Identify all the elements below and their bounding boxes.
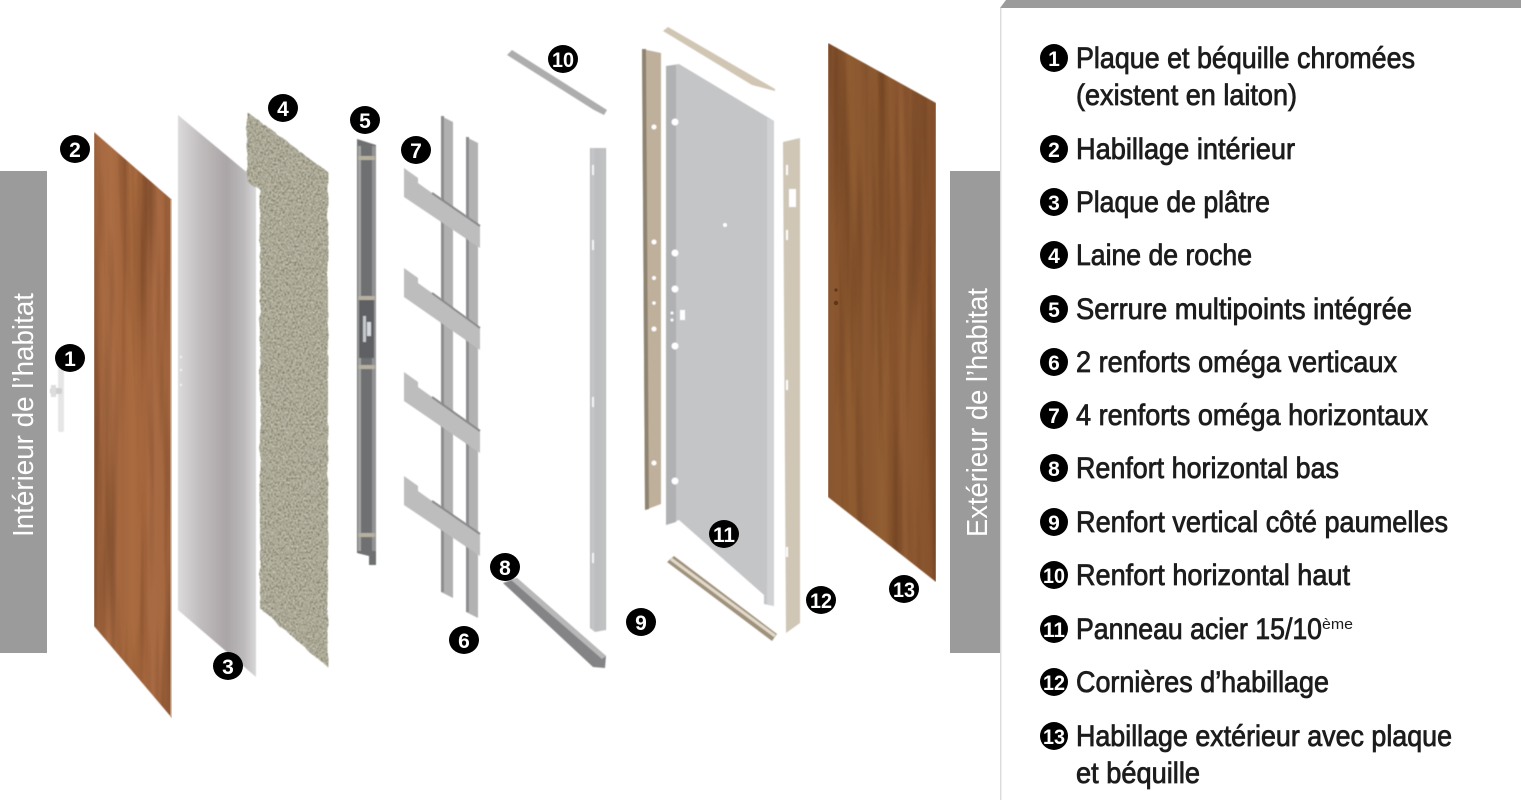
legend item 13: 13 [1043,726,1065,749]
side label: exterior [950,171,1000,653]
number badges on the drawing: 12 [810,590,832,613]
legend item 6: 6 [1048,352,1060,375]
part 11: steel panel [666,64,774,606]
part 1: chrome handle [50,365,64,432]
legend item 7: 7 [1048,405,1060,428]
legend item 10: 10 [1043,565,1065,588]
legend item 9: 9 [1048,512,1060,535]
legend item 8: 8 [1048,458,1060,481]
legend item 1: 1 [1048,48,1060,71]
side label: exterior: Extérieur de l’habitat [962,288,994,537]
number badges on the drawing: 2 [69,139,81,162]
number badges on the drawing: 1 [64,348,76,371]
panel: exploded door illustration [0,27,1000,718]
legend item 5: 5 [1048,299,1060,322]
part 10: upper horizontal reinforcement [507,50,607,115]
number badges on the drawing: 4 [277,98,289,121]
legend item 4: 4 [1048,245,1060,268]
number badges on the drawing: 7 [410,140,422,163]
part 3: plasterboard [178,115,256,677]
part 4: rock wool [247,112,328,668]
part 9: vertical hinge-side reinforcement [590,148,606,632]
legend item 1: (existent en laiton) [1076,79,1297,112]
legend item 2: Habillage intérieur [1076,133,1295,166]
left beige angle profile [642,49,661,510]
legend item 2: 2 [1048,139,1060,162]
legend item 8: Renfort horizontal bas [1076,452,1339,485]
legend item 11: 11 [1043,619,1065,642]
number badges on the drawing: 8 [499,557,511,580]
legend item 12: 12 [1043,672,1065,695]
legend item 13 [1040,720,1452,790]
legend item 5: Serrure multipoints intégrée [1076,293,1412,326]
top beige profile [663,27,775,91]
number badges on the drawing: 6 [458,630,470,653]
panel: legend [1000,0,1521,800]
legend item 9: Renfort vertical côté paumelles [1076,506,1448,539]
part 13: exterior wood cladding [828,43,936,582]
part 5: multipoint lock [357,139,376,565]
number badges on the drawing: 11 [713,524,735,547]
number badges on the drawing: 3 [222,656,234,679]
number badges on the drawing: 10 [552,49,574,72]
part 2: interior wood cladding [94,132,172,718]
legend item 3: 3 [1048,192,1060,215]
legend item 1 [1040,42,1415,112]
legend item 1: Plaque et béquille chromées [1076,42,1415,75]
side label: interior [0,171,47,653]
legend item 3: Plaque de plâtre [1076,186,1270,219]
legend item 10: Renfort horizontal haut [1076,559,1351,592]
number badges on the drawing: 5 [359,110,371,133]
legend item 13: et béquille [1076,757,1200,790]
legend item 11: Panneau acier 15/10 [1076,613,1322,646]
legend item 4: Laine de roche [1076,239,1252,272]
bottom beige profile [667,556,777,641]
part 8: lower horizontal reinforcement [503,578,606,668]
part 6: vertical omega reinforcements [441,116,478,618]
legend item 13: Habillage extérieur avec plaque [1076,720,1452,753]
part 7: horizontal omega reinforcements [404,168,480,556]
legend frame [1000,0,1521,800]
side label: interior: Intérieur de l’habitat [8,293,40,537]
part 12: right beige angle profile [783,138,800,633]
legend item 7: 4 renforts oméga horizontaux [1076,399,1428,432]
number badges on the drawing: 13 [893,579,915,602]
legend item 6: 2 renforts oméga verticaux [1076,346,1397,379]
number badges on the drawing [55,45,919,680]
legend item 11: ème [1322,616,1353,633]
number badges on the drawing: 9 [635,612,647,635]
legend item 12: Cornières d’habillage [1076,666,1329,699]
